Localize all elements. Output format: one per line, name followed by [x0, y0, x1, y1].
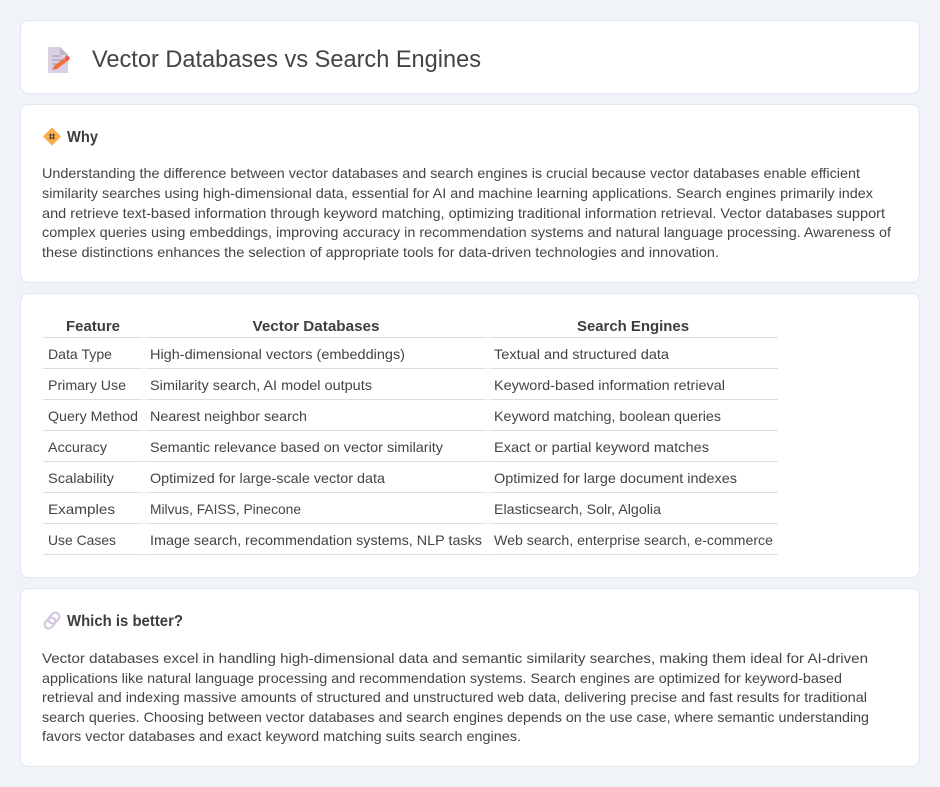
table header — [66, 318, 689, 335]
icon: document with pencil — [48, 47, 70, 73]
row: scalability: Scalability — [48, 470, 114, 486]
row: data type: Textual and structured data — [494, 346, 669, 362]
row: primary use: Keyword-based information retrieval — [494, 377, 725, 393]
panel: which is better — [20, 588, 920, 766]
text block: which paragraph — [42, 650, 869, 744]
row: query method: Query Method — [48, 408, 138, 424]
row: examples — [48, 501, 661, 517]
row: use cases: Image search, recommendation systems, NLP tasks — [150, 532, 482, 548]
row: accuracy: Semantic relevance based on vector similarity — [150, 439, 443, 455]
row: accuracy — [48, 439, 709, 455]
row: examples: Milvus, FAISS, Pinecone — [150, 501, 301, 517]
row: use cases: Web search, enterprise search, e-commerce — [494, 532, 773, 548]
row: use cases — [48, 532, 773, 548]
text block: why paragraph: similarity searches using high-dimensional data, essential for AI and machine learning applications. Search engines primarily index — [42, 185, 873, 201]
row: examples: Elasticsearch, Solr, Algolia — [494, 501, 661, 517]
text block: why paragraph: Understanding the difference between vector databases and search engines is crucial because vector databases enable efficient — [42, 165, 860, 181]
row: primary use: Similarity search, AI model outputs — [150, 377, 372, 393]
row: data type — [48, 346, 669, 362]
row: query method: Keyword matching, boolean queries — [494, 408, 721, 424]
text block: which paragraph: Vector databases excel in handling high-dimensional data and semantic similarity searches, making them ideal for AI-driven — [42, 650, 868, 666]
row: accuracy: Exact or partial keyword matches — [494, 439, 709, 455]
row: scalability: Optimized for large-scale vector data — [150, 470, 385, 486]
panel: why — [20, 104, 920, 282]
row: query method: Nearest neighbor search — [150, 408, 307, 424]
icon: link — [43, 611, 61, 630]
table header: Feature — [66, 318, 120, 335]
row: primary use — [48, 377, 725, 393]
row: use cases: Use Cases — [48, 532, 116, 548]
panel: header — [20, 20, 920, 94]
row: scalability — [48, 470, 737, 486]
text block: why paragraph — [42, 165, 891, 260]
text block: why paragraph: complex queries using embeddings, improving accuracy in recommendation systems and natural language processing. Awareness of — [42, 224, 891, 240]
title: Vector Databases vs Search Engines — [92, 46, 481, 73]
text block: which paragraph: applications like natural language processing and recommendation systems. Search engines are optimized for keyword-based — [42, 670, 842, 686]
row: query method — [48, 408, 721, 424]
heading: which is better: Which is better? — [67, 613, 183, 630]
row: primary use: Primary Use — [48, 377, 126, 393]
table header: Vector Databases — [252, 318, 380, 335]
table header: Search Engines — [577, 318, 689, 335]
panel: comparison table — [20, 294, 920, 578]
text block: which paragraph: search queries. Choosing between vector databases and search engines depends on the use case, where semantic understanding — [42, 709, 869, 725]
heading: why: Why — [67, 129, 98, 146]
text block: which paragraph: favors vector databases and exact keyword matching suits search engines. — [42, 728, 521, 744]
icon: warning diamond — [44, 128, 60, 144]
row: data type: High-dimensional vectors (embeddings) — [150, 346, 405, 362]
text block: why paragraph: and retrieve text-based information through keyword matching, optimizing traditional information retrieval. Vector databases support — [42, 205, 885, 221]
row: scalability: Optimized for large document indexes — [494, 470, 737, 486]
row: data type: Data Type — [48, 346, 112, 362]
text block: which paragraph: retrieval and indexing massive amounts of structured and unstructured web data, delivering precise and fast results for traditional — [42, 689, 867, 705]
text block: why paragraph: these distinctions enhances the selection of appropriate tools for data-driven technologies and innovation. — [42, 244, 719, 260]
row: accuracy: Accuracy — [48, 439, 107, 455]
row: examples: Examples — [48, 501, 115, 517]
